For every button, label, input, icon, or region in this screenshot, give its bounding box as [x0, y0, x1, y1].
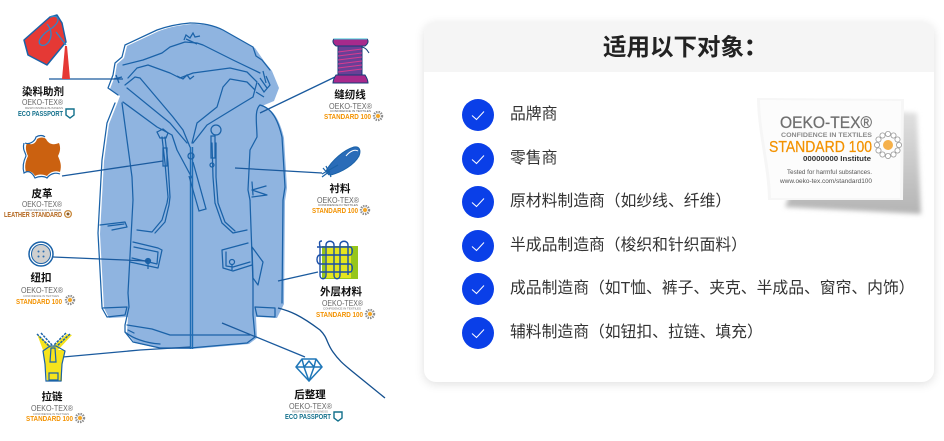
callout: zipper	[26, 333, 84, 423]
label: 皮革	[32, 187, 53, 200]
label text: STANDARD 100	[769, 139, 872, 156]
logo: STANDARD 100: STANDARD 100	[312, 206, 358, 215]
icon: thread spool	[333, 39, 369, 83]
list item: brands	[462, 99, 557, 131]
list item: retailers: 零售商	[510, 150, 557, 167]
icon: paint bucket	[24, 15, 70, 79]
logo: STANDARD 100: STANDARD 100	[316, 310, 363, 319]
jacket placket	[190, 147, 192, 349]
logo: STANDARD 100: OEKO-TEX®	[31, 404, 73, 413]
logo: STANDARD 100	[16, 286, 74, 306]
list item: retailers	[462, 143, 557, 175]
callout: leather	[4, 136, 71, 219]
logo: STANDARD 100: CONFIDENCE IN TEXTILES	[33, 412, 69, 416]
logo: STANDARD 100	[26, 404, 84, 423]
label: 拉链	[42, 390, 63, 403]
logo: STANDARD 100: OEKO-TEX®	[329, 102, 372, 111]
list item: raw material makers: 原材料制造商（如纱线、纤维）	[510, 193, 731, 210]
label: 衬料	[330, 182, 351, 195]
logo: STANDARD 100: CONFIDENCE IN TEXTILES	[323, 306, 361, 310]
label: 缝纫线	[334, 88, 366, 101]
list item: finished product makers: 成品制造商（如T恤、裤子、夹克、半成品、窗帘、内饰）	[510, 280, 915, 297]
logo: STANDARD 100: CONFIDENCE IN TEXTILES	[318, 203, 358, 207]
list item: accessory makers	[462, 317, 763, 349]
logo: STANDARD 100	[324, 102, 382, 121]
jacket	[98, 23, 287, 349]
jacket illustration with material callouts	[4, 14, 386, 424]
logo: ECO PASSPORT: RESPONSIBLE BUSINESS	[292, 410, 328, 414]
label text: CONFIDENCE IN TEXTILES	[781, 132, 873, 139]
logo: STANDARD 100: CONFIDENCE IN TEXTILES	[23, 294, 59, 298]
callout: sewing thread	[324, 39, 382, 121]
icon: feather	[322, 147, 360, 177]
heading	[424, 22, 934, 72]
label: 染料助剂	[22, 85, 64, 98]
icon: zipper pull	[37, 333, 72, 381]
logo: ECO PASSPORT: ECO PASSPORT	[285, 414, 332, 421]
label: 后整理	[294, 388, 326, 401]
icon: leather hide	[23, 136, 61, 178]
list item: accessory makers: 辅料制造商（如钮扣、拉链、填充）	[510, 324, 763, 341]
logo: STANDARD 100: OEKO-TEX®	[322, 299, 363, 308]
logo: STANDARD 100	[312, 196, 369, 215]
logo: ECO PASSPORT: OEKO-TEX®	[289, 402, 332, 411]
callout: finishing	[285, 359, 342, 421]
label text: 00000000 Institute	[803, 156, 871, 163]
logo: ECO PASSPORT: RESPONSIBLE BUSINESS	[25, 106, 63, 110]
label text	[769, 114, 873, 185]
logo: STANDARD 100: OEKO-TEX®	[317, 196, 359, 205]
list item: semi-finished makers: 半成品制造商（梭织和针织面料）	[510, 237, 747, 254]
heading: 适用以下对象：	[603, 34, 768, 60]
label text: OEKO-TEX®	[780, 114, 872, 132]
panel: applicable parties	[424, 22, 934, 382]
logo: ECO PASSPORT: ECO PASSPORT	[18, 111, 64, 118]
logo: LEATHER STANDARD	[4, 200, 71, 219]
list item: finished product makers	[462, 273, 915, 305]
logo: ECO PASSPORT: OEKO-TEX®	[22, 98, 63, 107]
logo: ECO PASSPORT	[18, 98, 74, 118]
label text: www.oeko-tex.com/standard100	[779, 178, 872, 185]
label: 纽扣	[30, 271, 52, 284]
label cloth	[757, 98, 904, 200]
logo: STANDARD 100: STANDARD 100	[16, 297, 62, 306]
icon: button	[29, 242, 53, 266]
logo: LEATHER STANDARD: CONFIDENCE IN LEATHER	[25, 208, 62, 212]
icon: woven fabric	[317, 241, 358, 279]
label: 外层材料	[320, 285, 362, 298]
callout: dye auxiliaries	[18, 15, 74, 118]
logo: STANDARD 100: STANDARD 100	[26, 414, 73, 423]
logo: ECO PASSPORT	[285, 402, 342, 421]
logo: STANDARD 100: CONFIDENCE IN TEXTILES	[330, 109, 371, 113]
list item: raw material makers	[462, 186, 731, 218]
logo: LEATHER STANDARD: OEKO-TEX®	[22, 200, 62, 209]
label flower emblem	[874, 131, 902, 159]
jacket hardware	[114, 33, 270, 270]
logo: STANDARD 100: OEKO-TEX®	[21, 286, 63, 295]
callout: lining	[312, 147, 369, 215]
icon: diamond	[296, 359, 322, 381]
list item: brands: 品牌商	[510, 106, 557, 123]
callout: button	[16, 242, 74, 306]
logo: STANDARD 100: STANDARD 100	[324, 112, 371, 121]
logo: STANDARD 100	[316, 299, 374, 319]
leader lines	[49, 77, 385, 398]
woven label: OEKO-TEX STANDARD 100	[757, 98, 924, 216]
label text: Tested for harmful substances.	[787, 169, 872, 176]
logo: LEATHER STANDARD: LEATHER STANDARD	[4, 212, 62, 219]
list item: semi-finished makers	[462, 230, 747, 262]
label shadow	[785, 112, 921, 214]
callout: outer fabric	[316, 241, 374, 319]
